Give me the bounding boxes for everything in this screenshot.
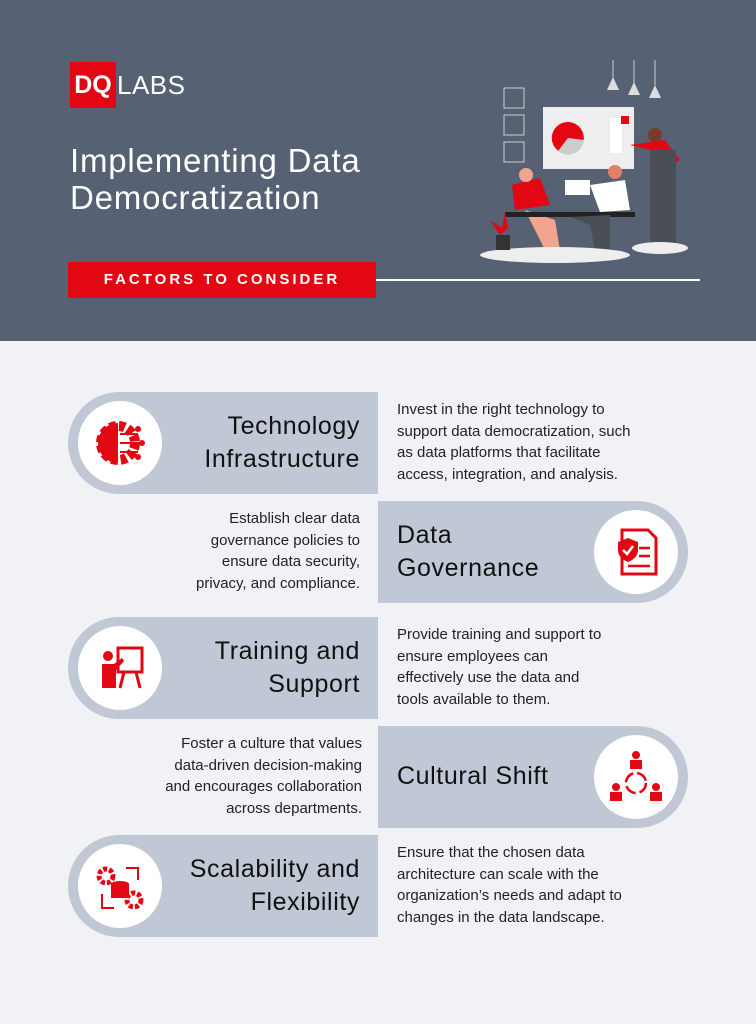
row 5: scalability and flexibility <box>68 835 378 937</box>
header panel <box>0 0 756 341</box>
heading: Governance <box>397 554 539 582</box>
row 3: training and support <box>68 617 378 719</box>
title: Implementing Data <box>70 142 361 179</box>
heading: Flexibility <box>251 888 360 916</box>
description 4: Foster a culture that values data-driven decision-making and encourages collaboration across departments. <box>165 735 362 816</box>
icon: gear circuit <box>78 401 162 485</box>
title: Democratization <box>70 179 320 216</box>
illustration: meeting <box>480 60 688 263</box>
description 1: Invest in the right technology to support data democratization, such as data platforms that facilitate access, integration, and analysis. <box>397 401 630 482</box>
icon: gears database <box>78 844 162 928</box>
title <box>70 142 361 216</box>
heading <box>397 521 539 582</box>
heading: Support <box>268 670 360 698</box>
description 3: Provide training and support to ensure employees can effectively use the data and tools available to them. <box>397 626 601 708</box>
row 2: data governance <box>378 501 688 603</box>
icon: trainer <box>78 626 162 710</box>
icon: people cycle <box>594 735 678 819</box>
heading: Scalability and <box>190 855 360 883</box>
logo <box>70 62 186 108</box>
heading <box>204 412 360 473</box>
row 1: technology infrastructure <box>68 392 378 494</box>
row 4: cultural shift <box>378 726 688 828</box>
heading: Data <box>397 521 452 549</box>
heading: Infrastructure <box>204 445 360 473</box>
description 2: Establish clear data governance policies to ensure data security, privacy, and compliance. <box>196 510 360 592</box>
description 5: Ensure that the chosen data architecture can scale with the organization’s needs and adapt to changes in the data landscape. <box>397 844 622 926</box>
logo: LABS <box>117 70 186 100</box>
banner: factors to consider <box>68 262 376 298</box>
heading: Training and <box>215 637 360 665</box>
heading: Technology <box>228 412 360 440</box>
icon: document shield <box>594 510 678 594</box>
heading <box>190 855 360 916</box>
logo: DQ <box>74 71 112 99</box>
banner: factors to consider: FACTORS TO CONSIDER <box>104 271 340 288</box>
heading <box>215 637 360 698</box>
heading: Cultural Shift <box>397 762 549 790</box>
